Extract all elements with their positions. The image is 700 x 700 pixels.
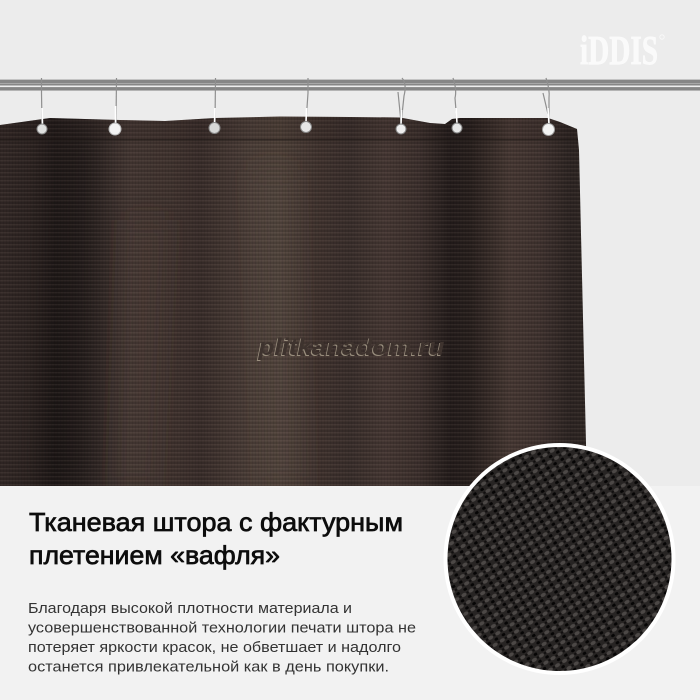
body text: останется привлекательной как в день покупки. [28, 658, 389, 676]
hook 3 [209, 78, 220, 134]
hook 4 [300, 78, 312, 132]
body text: усовершенствованной технологии печати штора не [28, 620, 416, 637]
background wall [0, 0, 700, 486]
body text [28, 600, 416, 676]
hook 1 [37, 78, 47, 134]
body text: Благодаря высокой плотности материала и [28, 600, 352, 617]
hook 2 [109, 78, 121, 135]
heading: плетением «вафля» [29, 540, 280, 570]
fabric close-up lens [444, 443, 676, 675]
watermark: plitkanadom.ru: plitkanadom.ru [256, 335, 444, 362]
curtain rod [0, 79, 700, 91]
watermark: plitkanadom.ru: plitkanadom.ru [257, 334, 445, 361]
hook 7 [542, 78, 554, 136]
body text: потеряет яркости красок, не обветшает и надолго [28, 639, 401, 656]
bottom text panel [0, 486, 700, 700]
curtain with folds and woven texture [0, 110, 590, 490]
hook 5 [396, 78, 406, 134]
heading: Тканевая штора с фактурным [29, 507, 403, 537]
hook 6 [452, 78, 462, 133]
logo: iDDIS: iDDIS [580, 27, 658, 73]
curtain hooks and eyelets [37, 78, 554, 136]
heading [29, 507, 403, 570]
